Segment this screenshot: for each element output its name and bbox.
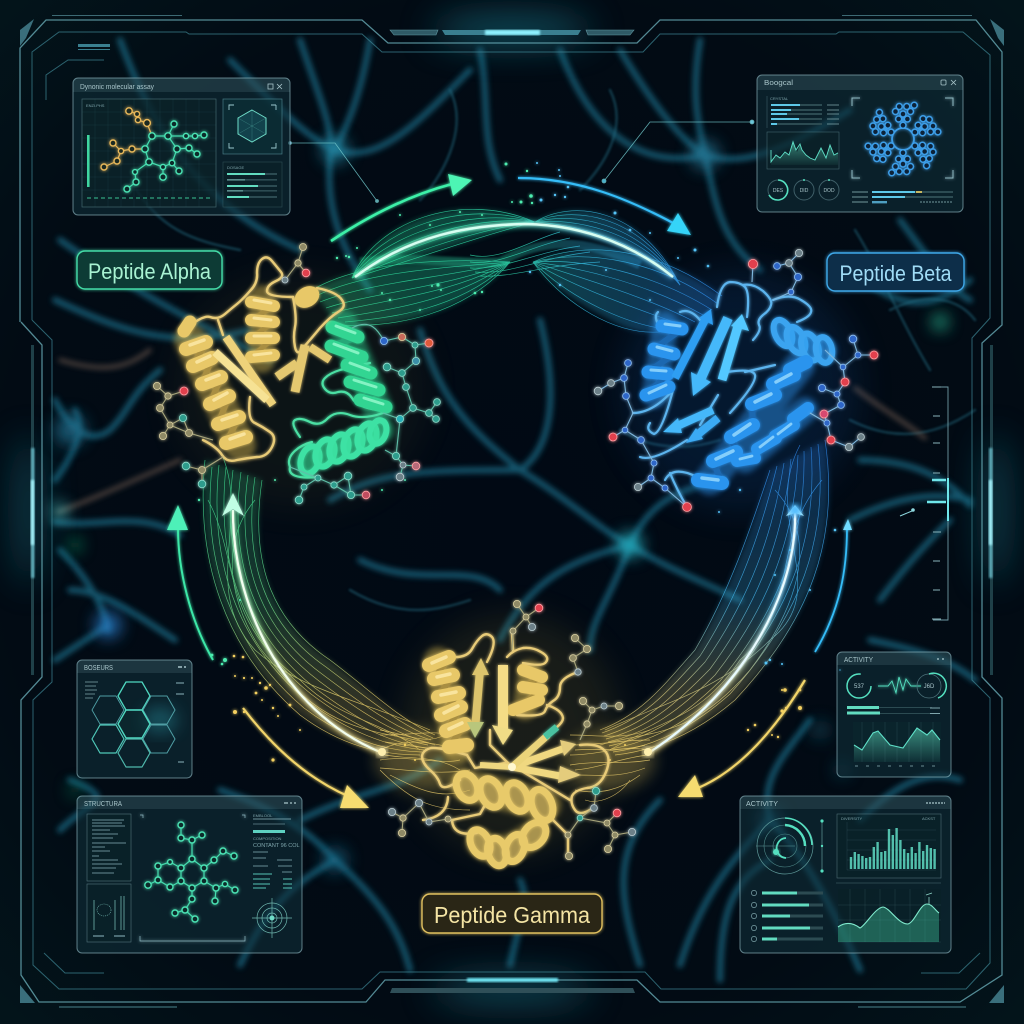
second helix	[755, 419, 794, 458]
radar gauge	[756, 818, 824, 874]
panel: hexagon map	[77, 660, 192, 778]
dials and pulse: J6D	[924, 684, 935, 690]
molecule plot: ENZI.PHS	[86, 103, 105, 108]
ribbon: right, blue to yellow	[600, 440, 829, 755]
protein: Peptide Gamma	[388, 600, 636, 868]
gauges: DID	[800, 188, 809, 194]
line chart	[767, 132, 839, 169]
gauges: DOD	[823, 188, 835, 194]
right data column: COMPOSITION	[253, 836, 282, 841]
hexagon cluster	[92, 682, 178, 767]
panel: molecular assay	[73, 78, 290, 215]
dials and pulse	[847, 673, 946, 698]
arrow: left green	[167, 505, 213, 660]
helix glow backing	[438, 662, 545, 850]
helix glow backing	[190, 298, 382, 462]
gauges: DES	[773, 188, 784, 194]
neuron nodes	[53, 137, 947, 872]
panel title: BOSEURS	[84, 665, 113, 672]
molecule diagram	[140, 815, 245, 941]
bars: CRYSTAL	[770, 96, 789, 101]
horizontal bars	[751, 890, 823, 942]
gauges	[768, 179, 839, 200]
ribbon: top, green to blue	[312, 209, 722, 333]
bar chart: DIVERSITY	[841, 816, 862, 821]
protein: Peptide Alpha	[153, 244, 440, 510]
protein: Peptide Beta	[594, 249, 878, 511]
panel: biological	[757, 75, 963, 212]
panel title: Boogcal	[764, 80, 794, 87]
label: Peptide Alpha	[77, 251, 222, 289]
pointer lines	[288, 120, 754, 202]
panel title: ACTIVITY	[746, 799, 778, 808]
green domain	[289, 326, 389, 478]
right data column: EMBLOOL	[253, 813, 273, 818]
right data column	[253, 813, 300, 888]
panel title: ACTIVITY	[844, 655, 873, 664]
hexagon viewer	[223, 99, 282, 154]
small chart box	[87, 884, 131, 942]
dial	[252, 898, 292, 938]
yellow domain	[184, 257, 344, 461]
arrow: bottom-right gold	[678, 680, 805, 797]
panel: activity small	[837, 652, 951, 777]
text column	[87, 814, 131, 881]
right data column: CONTANT 96 COL	[253, 843, 300, 849]
bar chart	[837, 814, 941, 878]
lower helix	[452, 770, 557, 868]
bar chart: ACKST	[922, 816, 936, 821]
area chart	[853, 722, 941, 766]
right-side ruler	[900, 387, 948, 620]
panel title: STRUCTURA	[84, 799, 122, 808]
blue molecule	[852, 98, 953, 178]
label: Peptide Beta	[827, 253, 964, 291]
beta sheets	[675, 318, 706, 378]
sheets	[475, 670, 480, 730]
label: Peptide Alpha: Peptide Alpha	[88, 259, 212, 284]
arrow: top blue	[518, 178, 691, 235]
label: Peptide Gamma	[422, 894, 602, 933]
panel title: Dynonic molecular assay	[80, 84, 154, 91]
panel: structure	[77, 796, 302, 953]
particles	[198, 162, 841, 762]
molecule plot	[82, 99, 216, 207]
data bars	[223, 162, 282, 207]
area chart	[836, 883, 941, 942]
arrow: top green	[331, 174, 472, 241]
attached molecules	[153, 244, 440, 504]
dials and pulse: 537	[854, 684, 865, 690]
label: Peptide Gamma: Peptide Gamma	[434, 902, 590, 928]
data bars: DOSAGE	[227, 165, 244, 170]
bars	[767, 96, 839, 128]
progress bars	[852, 191, 953, 203]
ribbon: left, green to yellow	[203, 455, 435, 755]
long helix	[713, 370, 794, 483]
arrowhead on right ribbon	[786, 505, 804, 516]
arrow: right blue	[815, 519, 852, 652]
label: Peptide Beta: Peptide Beta	[840, 261, 952, 286]
ribbon: bottom convergence, gold	[375, 730, 655, 810]
coils upper right	[770, 317, 834, 364]
arrow: bottom-left gold	[243, 708, 369, 808]
panel: activity large	[740, 796, 951, 953]
helix glow backing	[655, 325, 825, 480]
bars	[847, 706, 940, 714]
arrowhead on left ribbon	[222, 493, 244, 516]
